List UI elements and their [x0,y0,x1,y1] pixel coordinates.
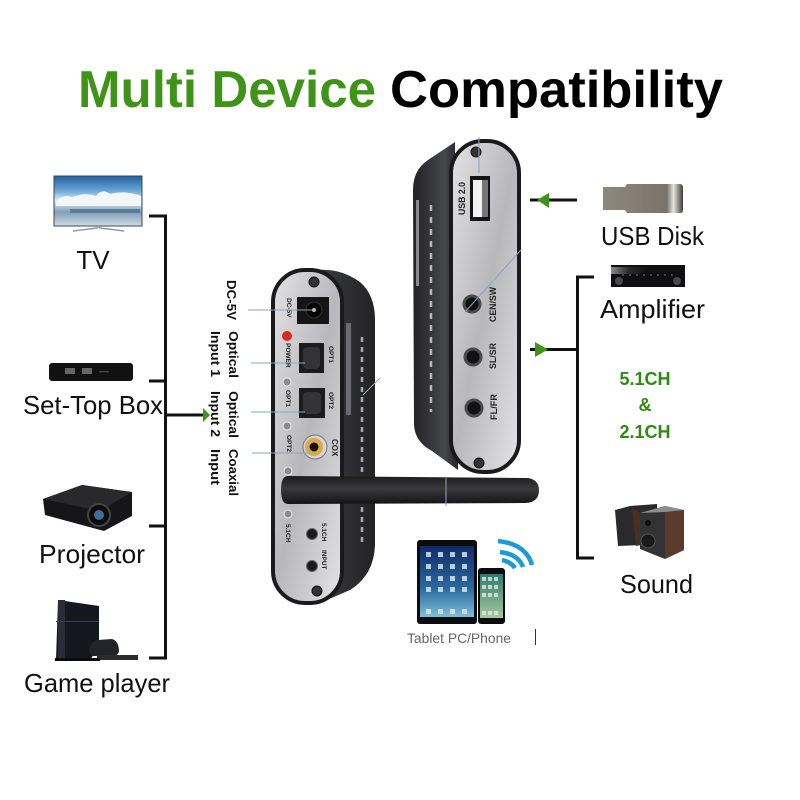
label: Amplifier: Amplifier [600,294,705,324]
right device [413,141,519,472]
device side [318,270,375,603]
port captions: Input 2 [208,391,222,437]
port captions [208,280,240,496]
left device [273,270,375,603]
port labels [457,182,499,420]
device face [273,270,342,603]
output connector bracket [530,277,594,558]
audio jacks [464,296,482,416]
port labels [284,298,339,570]
text cursor mark [535,629,536,645]
port captions: Coaxial [226,449,240,496]
channel text [619,369,671,442]
channel text: & [638,395,652,415]
phone [478,568,505,624]
device side [413,142,458,470]
port labels: DC-5V [285,298,292,318]
channel text: 2.1CH [619,422,671,442]
wifi symbol [498,541,532,568]
side print [416,200,431,412]
label: TV: TV [76,245,110,275]
icon: speakers [615,504,684,559]
device face [451,141,519,472]
port labels: SL/SR [488,343,498,369]
port labels: OPT1 [284,390,291,407]
arrow: output [535,342,548,357]
title: Multi Device [78,61,376,119]
side print [346,323,362,545]
pointer lines [248,137,521,506]
port labels: OPT1 [327,346,334,363]
port labels: INPUT [320,550,327,570]
tablet [417,540,477,624]
antenna [281,476,539,504]
port labels: FL/FR [489,393,499,420]
input connector bracket [149,216,205,658]
port labels: 5.1CH [284,524,291,543]
arrow: input [203,408,210,422]
port labels: USB 2.0 [457,182,467,215]
screws [471,147,484,468]
channel text: 5.1CH [619,369,671,389]
label: USB Disk: USB Disk [601,221,705,251]
port captions: Optical [226,331,240,378]
5.1CH input jacks [306,528,318,572]
port captions: Input [208,449,222,486]
status LEDs [283,378,292,518]
label: Game player: Game player [24,668,170,698]
port labels: CEN/SW [488,287,498,322]
port labels: OPT2 [285,435,292,452]
DC jack [297,297,329,324]
USB port [470,176,490,221]
port labels: COX [330,439,339,457]
arrow: USB [530,193,577,208]
port labels: 5.1CH [320,523,327,542]
icon: set-top box [49,363,133,381]
icon: amplifier [611,265,685,287]
port labels: POWER [284,343,291,368]
port captions: DC-5V [224,280,238,321]
label: Projector: Projector [39,539,145,569]
port captions: Input 1 [208,331,222,377]
icon: TV [54,176,142,231]
icon: USB disk [603,184,683,213]
power LED [282,331,292,341]
port captions: Optical [226,391,240,438]
screws [309,277,322,596]
title: Compatibility [390,61,723,119]
label: Tablet PC/Phone: Tablet PC/Phone [407,630,511,646]
coaxial port [303,435,327,459]
optical port 2 [299,388,325,418]
icon: game console [55,600,138,661]
label: Set-Top Box: Set-Top Box [23,390,163,420]
port labels: OPT2 [327,392,334,409]
optical port 1 [299,343,324,373]
label: Sound: Sound [620,569,693,599]
icon: projector [43,485,132,531]
title [78,61,723,119]
icon: tablet and phone [417,540,532,624]
